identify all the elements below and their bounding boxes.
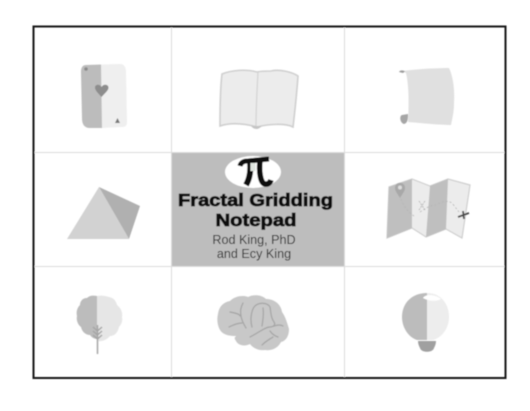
icon: airplane: [458, 211, 469, 219]
icon: brain: [217, 295, 289, 350]
text: authors: Rod King, PhD: [212, 233, 296, 247]
icon: pyramid: [67, 187, 140, 239]
heading: book title: [178, 190, 333, 230]
heading: book title: Notepad: [216, 210, 296, 230]
icon: map pin: [395, 183, 405, 198]
icon: light bulb: [402, 293, 449, 352]
icon: playing card: [81, 64, 127, 128]
icon: paper scroll: [399, 68, 454, 125]
text: authors: [212, 233, 296, 261]
icon: tree: [77, 296, 122, 354]
panel: title block: [172, 153, 344, 266]
icon: folded map: [387, 179, 470, 238]
grid frame: [34, 26, 506, 378]
icon: pi logo: [225, 156, 281, 188]
text: authors: and Ecy King: [217, 247, 291, 261]
heading: book title: Fractal Gridding: [178, 190, 333, 210]
icon: open book: [220, 70, 298, 129]
